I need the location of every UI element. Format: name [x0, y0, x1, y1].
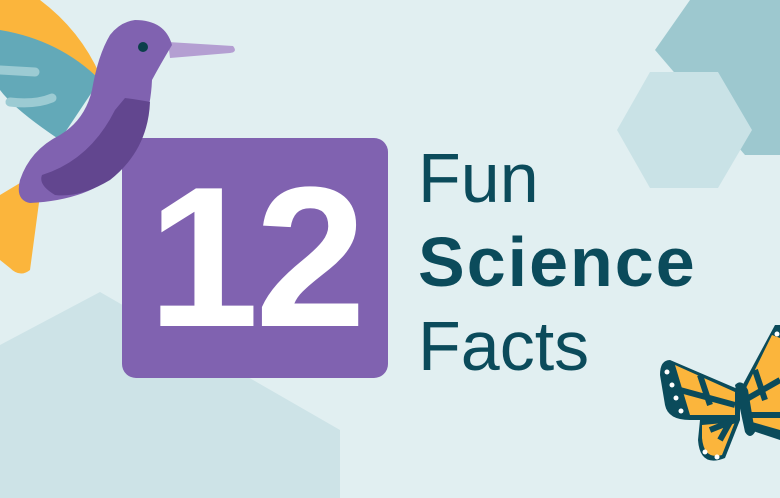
- number 12: 12: [148, 146, 362, 369]
- purple number box: [122, 138, 388, 378]
- title text: Science: [418, 223, 697, 301]
- title text: [418, 139, 697, 385]
- title text: Facts: [418, 307, 589, 385]
- icon: hummingbird: [0, 0, 235, 274]
- title text: Fun: [418, 139, 539, 217]
- icon: butterfly: [660, 325, 780, 461]
